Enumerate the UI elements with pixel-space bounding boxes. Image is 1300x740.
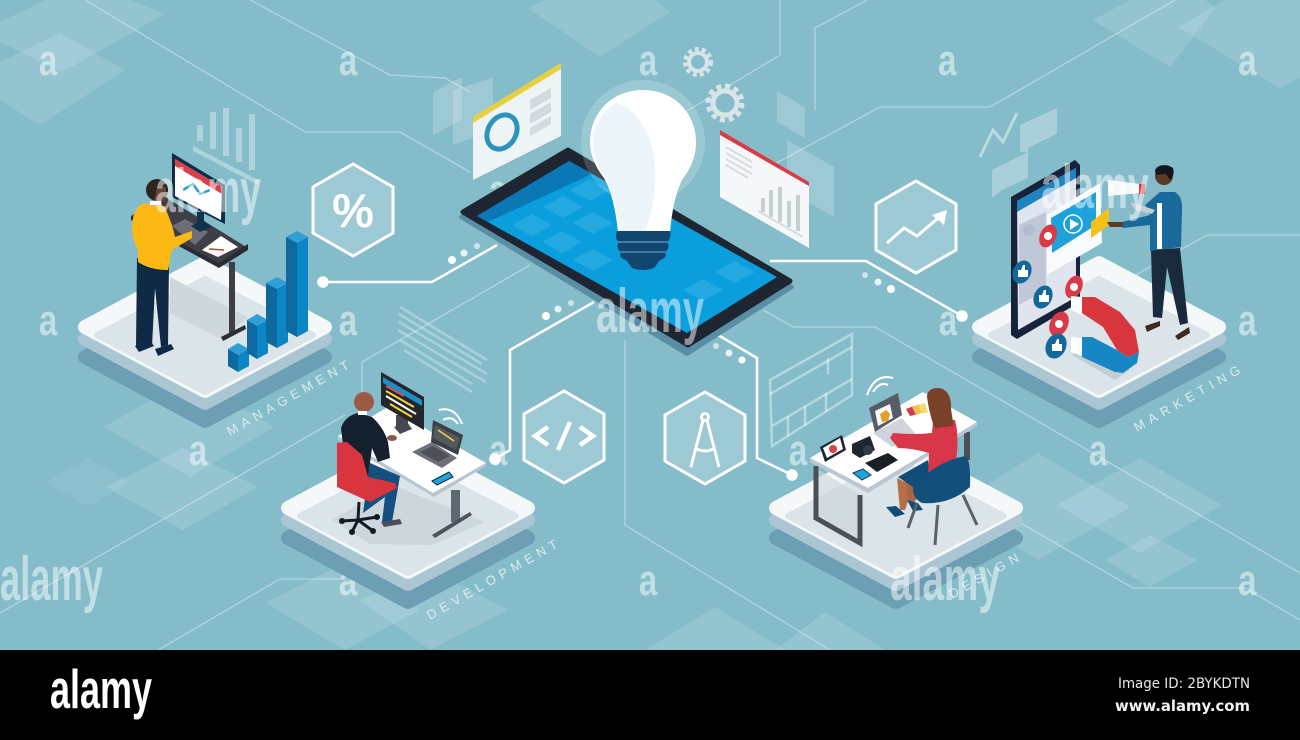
image id: Image ID: 2BYKDTN (1118, 676, 1250, 692)
large phone (1011, 160, 1080, 339)
person in yellow sweater (132, 179, 192, 356)
standing desk (131, 197, 248, 341)
watermark letters: a (489, 167, 507, 215)
smartphone on desk (853, 469, 871, 480)
scene: design (770, 334, 977, 545)
scene: management (131, 108, 308, 372)
watermark wordmarks: alamy (1041, 153, 1149, 222)
platform: design (776, 444, 1016, 602)
website: www.alamy.com (1115, 697, 1250, 715)
watermark letters: a (489, 427, 507, 475)
watermark letters: a (639, 557, 657, 605)
connector: marketing (770, 261, 966, 320)
watermark letters: a (939, 297, 957, 345)
card: donut chart (473, 63, 561, 180)
watermark wordmarks (0, 153, 1149, 614)
magnet (1071, 296, 1139, 373)
connector: management (318, 243, 497, 286)
watermark letters: a (938, 37, 957, 85)
office desk (338, 407, 486, 538)
graphics tablet (865, 453, 898, 472)
developer (337, 392, 402, 535)
bar chart (228, 231, 308, 372)
megaphone (1108, 180, 1145, 196)
watermark letters: a (39, 37, 57, 85)
designer (886, 388, 977, 545)
label: development: DEVELOPMENT (424, 535, 562, 623)
platform: marketing (979, 263, 1219, 421)
connector: design (713, 335, 796, 480)
watermark letters: a (339, 297, 357, 345)
scene: development (332, 307, 487, 545)
watermark letters: a (1238, 37, 1257, 85)
hexagon: percent: % (332, 184, 374, 237)
platform: management (85, 263, 325, 421)
footer bar (0, 650, 1300, 740)
light bulb (581, 80, 705, 270)
ghost bar chart (193, 108, 258, 185)
ghost panels (433, 77, 834, 217)
watermark letters: a (39, 297, 57, 345)
watermark letters: a (1089, 427, 1107, 475)
sticky note (1091, 208, 1109, 238)
gears (685, 49, 742, 120)
watermark letters: a (339, 557, 357, 605)
category labels (224, 356, 1245, 623)
card: report with bars (720, 130, 809, 248)
watermark letters: a (1238, 557, 1257, 605)
watermark letters: a (339, 37, 357, 85)
ghost chart and speech icons (980, 108, 1057, 198)
desk phone (432, 472, 453, 485)
label: design: DESIGN (946, 549, 1023, 602)
ghost code lines (398, 307, 487, 392)
camera (852, 436, 875, 458)
watermark wordmarks: alamy (155, 157, 261, 226)
hexagon: growth chart (876, 181, 956, 273)
label: management: MANAGEMENT (224, 356, 353, 439)
tablet (820, 435, 846, 462)
color swatches (906, 403, 928, 416)
wifi icon (439, 409, 462, 424)
desktop monitor with code (381, 372, 424, 434)
watermark letters: a (1238, 297, 1257, 345)
watermark letters: a (789, 167, 807, 215)
smartphone (461, 150, 792, 354)
floor mat (332, 485, 485, 545)
watermark letters: a (189, 427, 207, 475)
watermark letters: a (639, 37, 657, 85)
ghost wireframe (770, 334, 852, 446)
platform: development (288, 444, 528, 602)
hexagon: compass (665, 392, 745, 484)
watermark wordmarks: alamy (0, 545, 103, 614)
frame desk (810, 392, 977, 543)
thumbs-up icons (1009, 257, 1071, 362)
laptop (412, 420, 463, 468)
wifi icon (867, 377, 893, 395)
desk laptop (869, 393, 918, 447)
label: marketing: MARKETING (1131, 361, 1245, 435)
marketer (1107, 165, 1190, 340)
magnet shadow (1072, 345, 1130, 380)
watermark wordmarks: alamy (596, 277, 704, 346)
scene: marketing (980, 108, 1190, 380)
watermark letters (39, 37, 1257, 605)
hexagon: percent (313, 164, 393, 256)
footer logo: alamy (50, 658, 152, 720)
heart reaction icons (1036, 222, 1086, 340)
watermark wordmarks: alamy (890, 545, 1000, 614)
watermark letters: a (789, 427, 807, 475)
floor shadow (170, 277, 247, 340)
connector: development (490, 300, 594, 464)
video card (1047, 183, 1102, 275)
hexagon: code (524, 391, 604, 483)
monitor (172, 153, 225, 232)
